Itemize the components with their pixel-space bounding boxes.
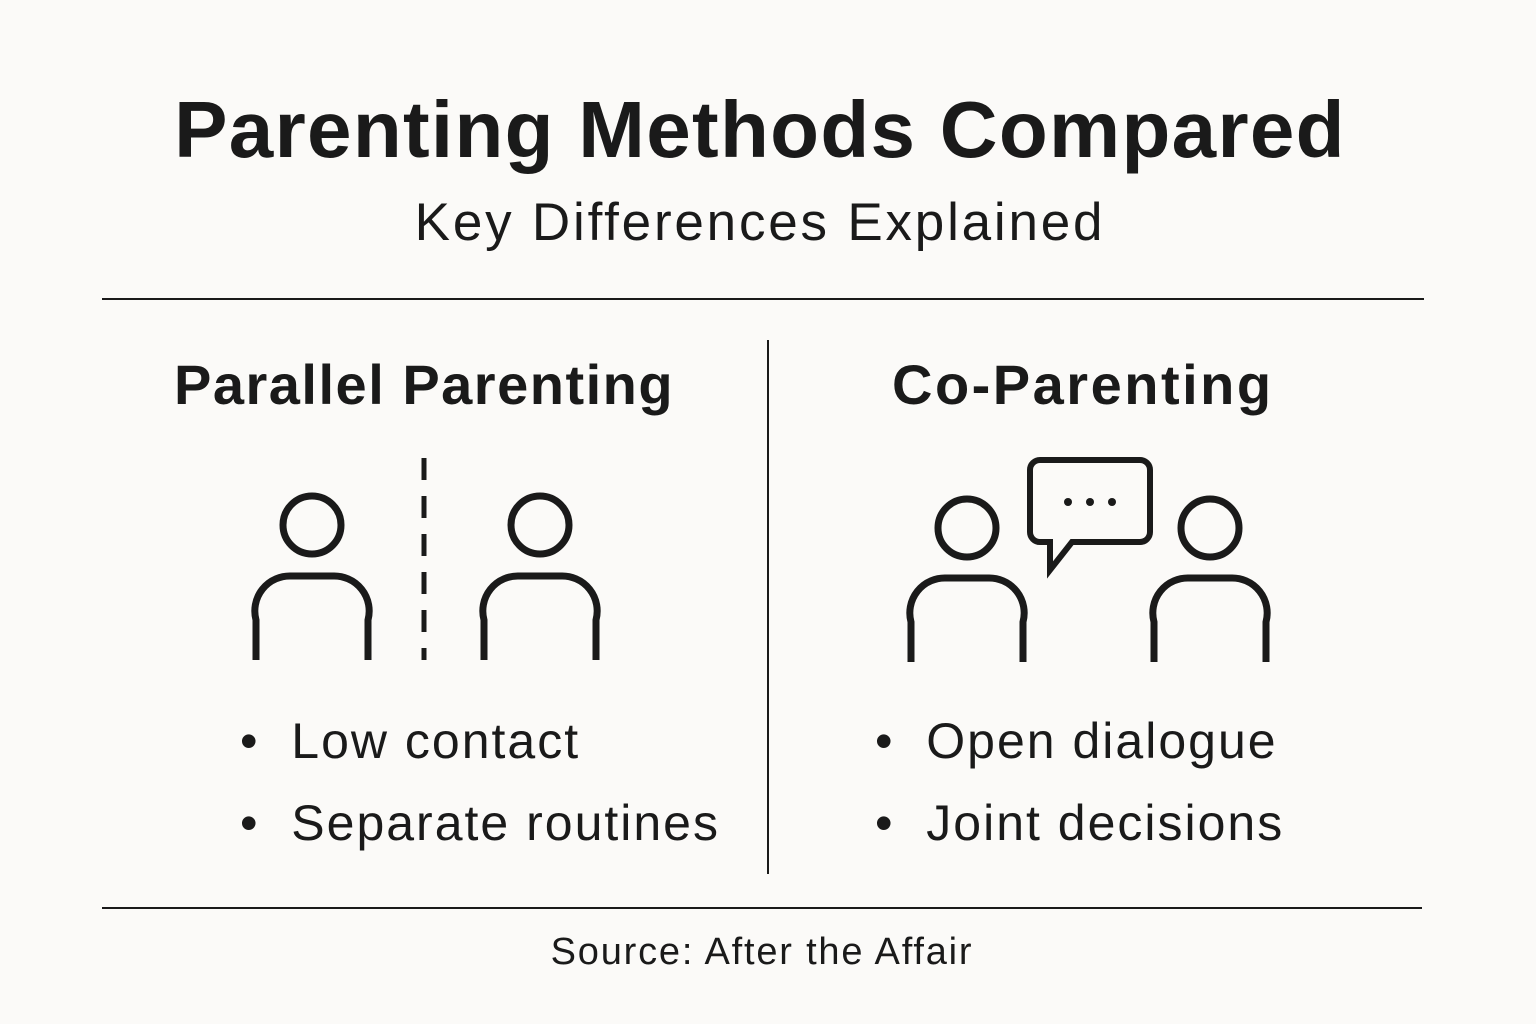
- title: Parenting Methods Compared: [174, 85, 1346, 174]
- list: co-parenting: • Open dialogue: [875, 713, 1278, 769]
- divider bottom: [102, 907, 1422, 909]
- list: co-parenting: • Joint decisions: [875, 795, 1284, 851]
- subtitle: Key Differences Explained: [415, 193, 1105, 252]
- heading: parallel parenting: Parallel Parenting: [174, 353, 674, 416]
- list: parallel: • Low contact: [240, 713, 580, 769]
- list: parallel: [240, 713, 720, 851]
- source: Source: After the Affair: [551, 931, 973, 973]
- list: parallel: • Separate routines: [240, 795, 720, 851]
- icon: co-parents with speech bubble: [906, 457, 1271, 662]
- list: co-parenting: [875, 713, 1284, 851]
- heading: co-parenting: Co-Parenting: [892, 353, 1274, 416]
- divider vertical: [767, 340, 769, 874]
- icon: parallel parents: [251, 458, 601, 660]
- divider top: [102, 298, 1424, 300]
